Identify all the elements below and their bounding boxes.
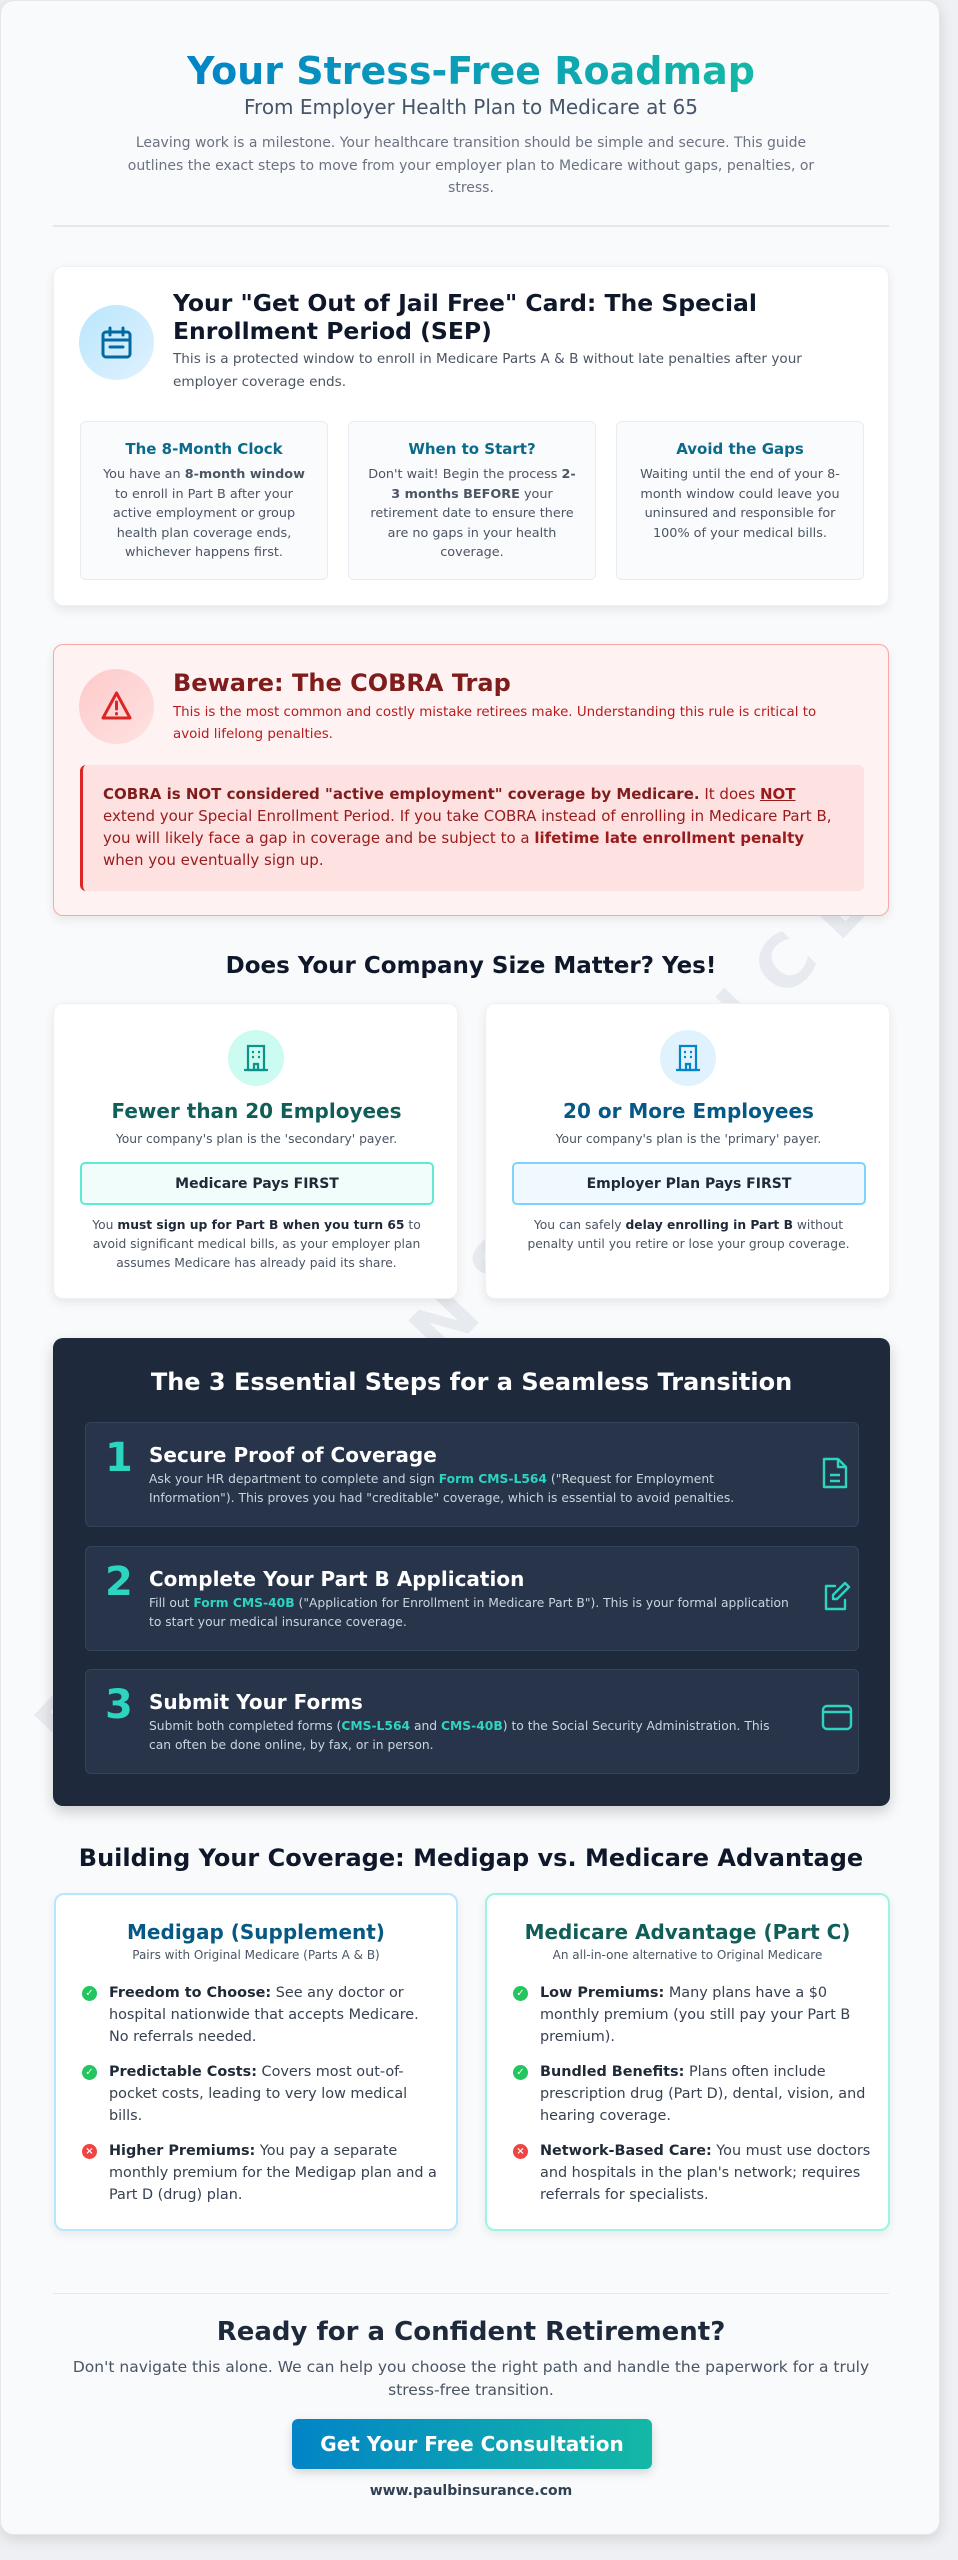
panel: Medicare Advantage [485, 1893, 890, 2231]
description: This is the most common and costly mistake retirees make. Understanding this rule is critical to avoid lifelong penalties. [173, 705, 816, 742]
callout: COBRA is NOT considered "active employment" coverage by Medicare. It does NOT extend your Special Enrollment Period. If you take COBRA instead of enrolling in Medicare Part B, you will likely face a gap in coverage and be subject to a lifetime late enrollment penalty when you eventually sign up. [103, 785, 832, 869]
button: Get Your Free Consultation [320, 2432, 624, 2456]
heading: The 3 Essential Steps for a Seamless Transition [151, 1368, 792, 1396]
panel: Medigap: Medigap (Supplement) [127, 1920, 385, 1944]
title: Your Stress-Free Roadmap [187, 49, 755, 93]
step 1: Secure Proof of Coverage [149, 1443, 437, 1467]
panel: Medigap: Pairs with Original Medicare (Parts A & B) [132, 1948, 380, 1962]
callout [80, 765, 864, 891]
CTA text: Don't navigate this alone. We can help you choose the right path and handle the paperwork for a truly stress-free transition. [73, 2358, 869, 2398]
step 1 [85, 1422, 859, 1527]
panel: 20 or more [485, 1003, 890, 1299]
icon: warning [79, 669, 154, 744]
panel: fewer than 20: Your company's plan is the 'secondary' payer. [116, 1132, 397, 1146]
step 3 [85, 1669, 859, 1774]
pros and cons list: Bundled Benefits: Plans often include prescription drug (Part D), dental, vision, and hearing coverage. [540, 2064, 865, 2124]
heading: coverage: Building Your Coverage: Medigap vs. Medicare Advantage [79, 1844, 863, 1872]
icon: building [228, 1030, 284, 1086]
box: when to start: Don't wait! Begin the process 2-3 months BEFORE your retirement date to ensure there are no gaps in your health coverage. [368, 467, 576, 560]
panel: SEP [53, 266, 889, 606]
box: 8-month clock [80, 421, 328, 580]
step 2 [85, 1546, 859, 1651]
box: avoid gaps [616, 421, 864, 580]
step 3: Submit Your Forms [149, 1690, 363, 1714]
heading: Your "Get Out of Jail Free" Card: The Special Enrollment Period (SEP) [173, 289, 757, 345]
panel: COBRA trap [53, 644, 889, 916]
badge: Medicare Pays FIRST [175, 1176, 339, 1192]
panel: 3 steps [53, 1338, 890, 1806]
intro text: Leaving work is a milestone. Your healthcare transition should be simple and secure. This guide outlines the exact steps to move from your employer plan to Medicare without gaps, penalties, or stress. [128, 135, 814, 196]
panel: Medicare Advantage: Medicare Advantage (Part C) [525, 1920, 850, 1944]
panel: 20 or more: Your company's plan is the 'primary' payer. [556, 1132, 821, 1146]
panel: Medicare Advantage: An all-in-one alternative to Original Medicare [553, 1948, 822, 1962]
box: when to start: When to Start? [408, 440, 536, 458]
icon: building [660, 1030, 716, 1086]
badge: Employer Plan Pays FIRST [587, 1176, 791, 1192]
box: avoid gaps: Waiting until the end of your 8-month window could leave you uninsured and responsible for 100% of your medical bills. [640, 467, 840, 540]
step 1: Ask your HR department to complete and sign Form CMS-L564 ("Request for Employment Information"). This proves you had "creditable" coverage, which is essential to avoid penalties. [149, 1472, 734, 1505]
subtitle: From Employer Health Plan to Medicare at 65 [244, 95, 698, 119]
panel: Medigap [54, 1893, 458, 2231]
pros and cons list [513, 1985, 870, 2203]
pros and cons list: ✓ [516, 2067, 525, 2078]
badge [80, 1162, 434, 1205]
box: avoid gaps: Avoid the Gaps [676, 440, 804, 458]
icon: calendar [79, 305, 154, 380]
heading: 20 or More Employees [563, 1099, 814, 1123]
CTA heading: Ready for a Confident Retirement? [217, 2317, 725, 2347]
pros and cons list: Higher Premiums: You pay a separate monthly premium for the Medigap plan and a Part D (drug) plan. [109, 2143, 437, 2203]
watermark: PAUL B INSURANCE [19, 842, 903, 1768]
step 2: Fill out Form CMS-40B ("Application for Enrollment in Medicare Part B"). This is your formal application to start your medical insurance coverage. [149, 1596, 789, 1629]
heading: Beware: The COBRA Trap [173, 669, 511, 697]
box: 8-month clock: The 8-Month Clock [125, 440, 283, 458]
button [292, 2419, 652, 2469]
pros and cons list [82, 1985, 437, 2203]
step 1: 1 [105, 1435, 133, 1481]
panel: fewer than 20: You must sign up for Part B when you turn 65 to avoid significant medical bills, as your employer plan assumes Medicare has already paid its share. [92, 1218, 421, 1270]
website: www.paulbinsurance.com [370, 2483, 572, 2499]
description: This is a protected window to enroll in Medicare Parts A & B without late penalties after your employer coverage ends. [173, 351, 802, 390]
heading: Fewer than 20 Employees [111, 1099, 402, 1123]
step 3: 3 [105, 1682, 133, 1728]
step 2: 2 [105, 1559, 133, 1605]
pros and cons list: × [516, 2146, 525, 2157]
pros and cons list: × [85, 2146, 94, 2157]
pros and cons list: ✓ [516, 1988, 525, 1999]
pros and cons list: Predictable Costs: Covers most out-of-pocket costs, leading to very low medical bills. [109, 2064, 407, 2124]
panel: fewer than 20 [53, 1003, 458, 1299]
heading: company size: Does Your Company Size Matter? Yes! [226, 953, 716, 979]
step 2: Complete Your Part B Application [149, 1567, 524, 1591]
badge [512, 1162, 866, 1205]
box: 8-month clock: You have an 8-month window to enroll in Part B after your active employment or group health plan coverage ends, whichever happens first. [103, 467, 305, 560]
box: when to start [348, 421, 596, 580]
pros and cons list: ✓ [85, 2067, 94, 2078]
pros and cons list: ✓ [85, 1988, 94, 1999]
pros and cons list: Network-Based Care: You must use doctors and hospitals in the plan's network; requires referrals for specialists. [540, 2143, 870, 2203]
pros and cons list: Freedom to Choose: See any doctor or hospital nationwide that accepts Medicare. No referrals needed. [109, 1985, 419, 2045]
panel: 20 or more: You can safely delay enrolling in Part B without penalty until you retire or lose your group coverage. [527, 1218, 850, 1251]
step 3: Submit both completed forms (CMS-L564 and CMS-40B) to the Social Security Administration. This can often be done online, by fax, or in person. [149, 1719, 769, 1752]
pros and cons list: Low Premiums: Many plans have a $0 monthly premium (you still pay your Part B premium). [540, 1985, 850, 2045]
